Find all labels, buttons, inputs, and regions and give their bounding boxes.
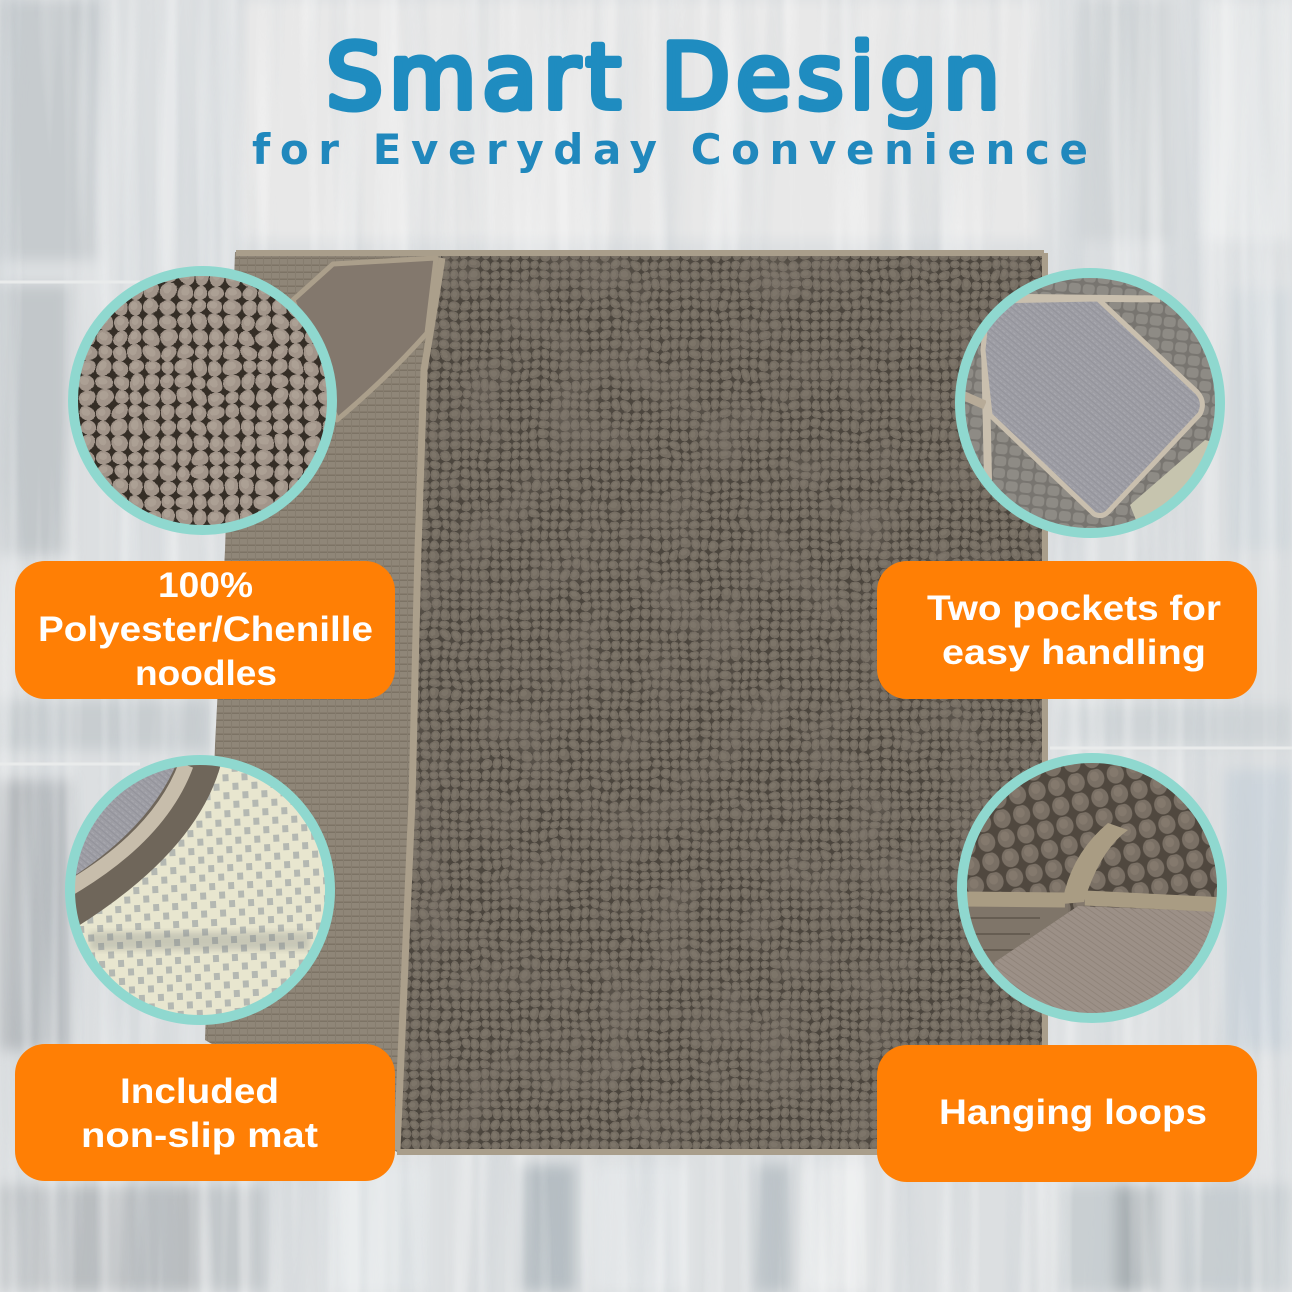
top binding xyxy=(985,297,1160,299)
label: polyester chenille: Polyester/Chenille xyxy=(38,610,373,649)
product: folded chenille mat xyxy=(205,240,1060,1170)
label: non-slip mat: Included xyxy=(120,1072,279,1111)
title xyxy=(252,25,1088,174)
ribbed panel xyxy=(968,906,1061,959)
callout circle: chenille noodles xyxy=(68,266,337,535)
label: non-slip mat: non-slip mat xyxy=(81,1116,318,1155)
callout circle: two pockets xyxy=(955,270,1225,540)
label: two pockets: easy handling xyxy=(942,633,1206,672)
label: hanging loops xyxy=(877,1045,1257,1182)
callout circle: non-slip mat xyxy=(60,755,335,1025)
label: polyester chenille: 100% xyxy=(158,566,253,605)
label: two pockets: Two pockets for xyxy=(927,589,1221,628)
label: polyester chenille xyxy=(15,561,395,699)
mat binding xyxy=(236,253,1045,1152)
towel xyxy=(994,906,1215,1013)
towel pocket corner xyxy=(293,258,436,420)
ribbed fold xyxy=(75,765,220,925)
mat back panel xyxy=(205,252,441,1152)
heading: Smart Design: Smart Design xyxy=(326,25,1000,130)
beige binding xyxy=(70,765,186,888)
mat chenille front xyxy=(380,240,1060,1170)
label: polyester chenille: noodles xyxy=(135,654,277,693)
subheading: for Everyday Convenience xyxy=(252,125,1088,174)
side loop xyxy=(962,395,985,405)
grey pocket xyxy=(983,299,1202,516)
grey towel corner xyxy=(76,768,175,875)
non-slip corner xyxy=(1130,440,1209,520)
binding xyxy=(958,898,1228,905)
label: hanging loops: Hanging loops xyxy=(939,1093,1207,1132)
label: two pockets xyxy=(877,561,1257,699)
callout circle: hanging loops xyxy=(958,755,1228,1025)
label: non-slip mat xyxy=(15,1044,395,1181)
hanging loop xyxy=(1062,823,1128,904)
side binding xyxy=(985,343,988,480)
